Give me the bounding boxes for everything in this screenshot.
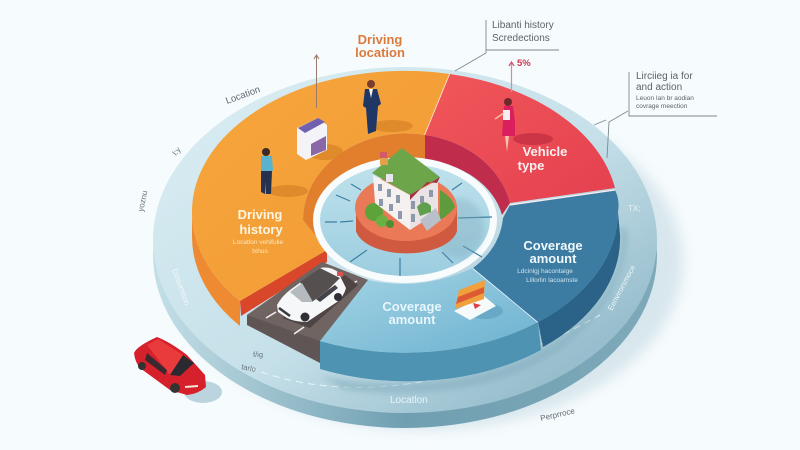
roof sign	[380, 152, 393, 182]
text: driving location heading: location	[355, 45, 405, 60]
arrow: up with 5 percent: 5%	[517, 58, 531, 69]
text: driving history label: txhus	[252, 248, 269, 255]
icon: kiosk machine	[297, 118, 343, 160]
text: coverage amount label: Coverage	[382, 299, 442, 314]
text: driving history label	[233, 207, 283, 255]
house on platform	[355, 148, 457, 253]
segment: coverage amount (light blue)	[320, 268, 541, 381]
platform	[355, 175, 457, 253]
segment: vehicle type (red)	[425, 74, 615, 215]
disc rim labels: yoznu	[136, 190, 149, 212]
disc rim labels: tarlo	[241, 362, 257, 374]
segment: coverage amount (dark blue)	[473, 190, 620, 347]
text: driving history label: history	[239, 222, 283, 237]
steps	[420, 208, 441, 231]
disc rim labels: TX;	[628, 204, 640, 213]
house walls	[373, 175, 410, 230]
disc rim labels: Perprroce	[539, 406, 576, 423]
icon: document card	[454, 280, 503, 320]
callout: top right: Libanti history	[492, 20, 554, 31]
central white ring	[313, 157, 497, 283]
disc rim labels	[136, 84, 640, 423]
person: woman in red	[495, 98, 553, 152]
callout: right: and action	[636, 82, 682, 93]
text: coverage amount detail: Ldcinlgj hacontaige	[517, 268, 573, 275]
bush	[365, 203, 394, 228]
disc rim labels: f/ig	[253, 350, 263, 359]
disc rim labels: Dosumtion	[170, 268, 192, 307]
callout: top right	[455, 20, 559, 71]
text: driving history label: Locatlon vehifulie	[233, 239, 283, 246]
callout: top right: Scredections	[492, 33, 550, 44]
text: coverage amount detail: Lillorlin lacoamste	[526, 277, 578, 284]
wedge shadow on disc	[320, 225, 628, 393]
segment: road with white car	[247, 262, 368, 363]
callout: right	[594, 71, 717, 158]
text: driving location heading: Driving	[358, 32, 402, 47]
roof	[372, 148, 440, 195]
text: coverage amount heading: Coverage	[523, 238, 583, 253]
person: man in suit	[363, 80, 413, 134]
base disc	[153, 67, 657, 428]
arrow: up with 5 percent	[509, 58, 531, 92]
icon: red car	[134, 337, 222, 403]
disc rim labels: Eenvirorsmoce	[606, 264, 637, 312]
windows	[378, 184, 433, 222]
arrow: up from kiosk	[314, 55, 319, 108]
segment: driving location and history (orange)	[192, 71, 450, 326]
text: vehicle type label: type	[518, 158, 544, 173]
disc rim labels: Location	[224, 84, 262, 107]
callout: right: Lirciieg ia for	[636, 71, 693, 82]
person: standing figure	[261, 148, 308, 197]
text: coverage amount heading: amount	[530, 251, 577, 266]
disc rim labels: Locatlon	[390, 395, 428, 406]
text: vehicle type label: Vehicle	[523, 144, 567, 159]
text: coverage amount label: amount	[389, 312, 436, 327]
callout: right: Leuon Ian br aodian	[636, 95, 694, 102]
disc shadow	[167, 94, 683, 430]
disc rim labels: l:y	[171, 145, 183, 157]
text: driving history label: Driving	[238, 207, 282, 222]
icon: white car	[277, 268, 346, 322]
callout: right: covrage meection	[636, 103, 688, 110]
